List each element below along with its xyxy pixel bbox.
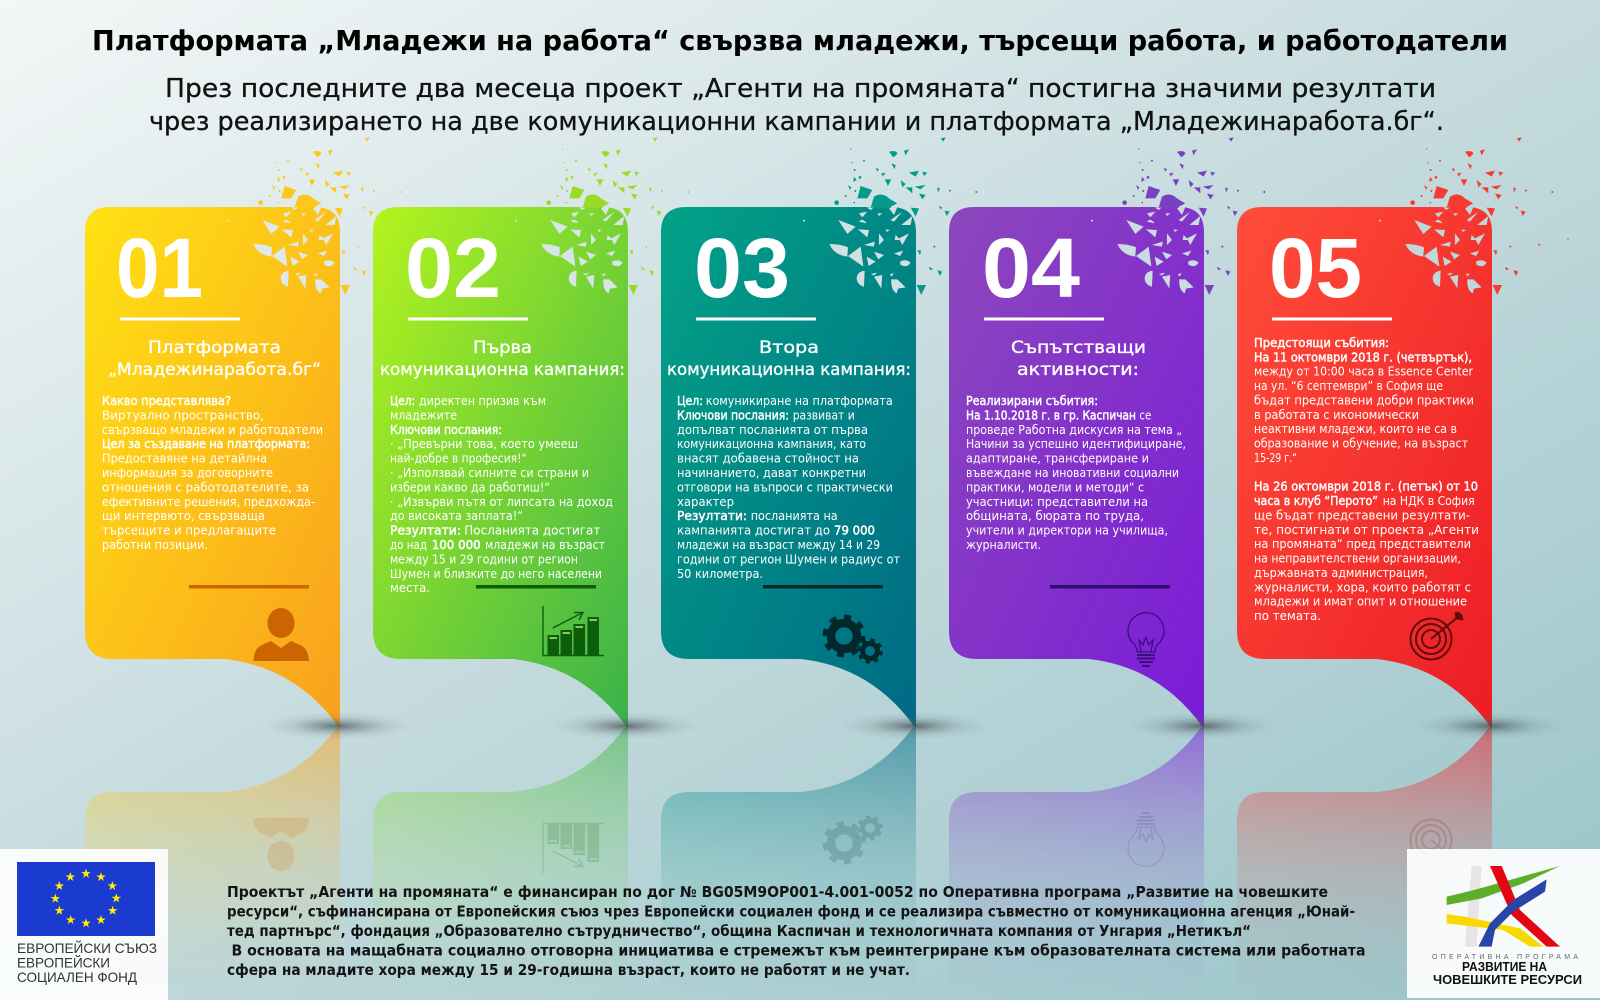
body text: Ключови послания: [390, 423, 502, 437]
body text [677, 394, 900, 581]
body text: Предстоящи събития: [1254, 336, 1389, 350]
heading: комуникационна кампания: [667, 360, 911, 380]
body text: директен призив към [419, 394, 546, 408]
body text: Предоставяне на детайлна [102, 452, 267, 466]
body text: · „Превърни това, което умееш [390, 437, 578, 451]
title: Платформата „Младежи на работа“ свързва младежи, търсещи работа, и работодатели [92, 24, 1508, 57]
body text: по темата. [1254, 609, 1321, 623]
body text: внасят добавена стойност на [677, 452, 859, 466]
logo: European Union [0, 849, 168, 1000]
number 05: 05 [1269, 221, 1362, 315]
rule [1272, 318, 1392, 320]
body text: търсещите и предлагащите [102, 524, 276, 538]
body text: години от регион Шумен и радиус от [677, 552, 900, 566]
footer text: тед партнърс“, фондация „Образователно сътрудничество“, община Каспичан и технологичната компания от Унгария „Нетикъл“ [227, 922, 1251, 940]
panel: card 05 upcoming events [1237, 137, 1569, 726]
body text: Цел за създаване на платформата: [102, 437, 310, 451]
number 02: 02 [405, 221, 501, 315]
body text: развиват и [793, 408, 855, 422]
panel: card 04 accompanying activities [949, 137, 1281, 726]
heading [1011, 338, 1146, 380]
body text: учители и директори на училища, [966, 524, 1168, 538]
body text: щи интервюто, свързваща [102, 509, 265, 523]
body text: бъдат представени добри практики [1254, 394, 1474, 408]
body text: журналисти. [966, 538, 1041, 552]
accent line [476, 585, 596, 588]
body text: младежи на възраст между 14 и 29 [677, 538, 880, 552]
body text: участници: представители на [966, 495, 1148, 509]
body text: ефективните решения, предхожда- [102, 495, 315, 509]
accent line [763, 585, 883, 588]
body text [1254, 336, 1479, 623]
EU caption: ЕВРОПЕЙСКИ [17, 954, 110, 970]
rule [120, 318, 240, 320]
panel: card 02 first campaign [373, 137, 705, 726]
body text: Какво представлява? [102, 394, 231, 408]
body text: 15-29 г.“ [1254, 451, 1297, 465]
heading [108, 338, 321, 380]
body text: места. [390, 581, 430, 595]
subtitle: чрез реализирането на две комуникационни кампании и платформата „Младежинаработа.бг“. [149, 107, 1444, 137]
body text: начинанието, дават конкретни [677, 466, 866, 480]
body text: отговори на въпроси с практически [677, 480, 893, 494]
programme caption: ОПЕРАТИВНА ПРОГРАМА [1432, 954, 1578, 961]
body text: най-добре в професия!“ [390, 452, 527, 466]
body text: 79 000 [834, 524, 875, 538]
number 03: 03 [694, 221, 790, 315]
body text: отношения с работодателите, за [102, 480, 309, 494]
body text: журналисти, хора, които работят с [1254, 580, 1471, 594]
body text: в работата с икономически [1254, 408, 1419, 422]
body text: На 26 октомври 2018 г. (петък) от 10 [1254, 480, 1478, 494]
body text: свързващо младежи и работодатели [102, 423, 323, 437]
heading: „Младежинаработа.бг“ [108, 360, 321, 380]
body text: Посланията достигат [464, 524, 600, 538]
body text: проведе Работна дискусия на тема „ [966, 423, 1182, 437]
body text: Цел: [677, 394, 703, 408]
subtitle [149, 74, 1444, 137]
footer text: ресурси“, съфинансирана от Европейския съюз чрез Европейски социален фонд и се реализира съвместно от комуникационна агенция „Юнай- [227, 902, 1355, 920]
body text: Ключови послания: [677, 408, 789, 422]
body text: се [1139, 408, 1151, 422]
body text: Реализирани събития: [966, 394, 1098, 408]
body text: младежи и имат опит и отношение [1254, 595, 1467, 609]
body text: · „Извърви пътя от липсата на доход [390, 495, 613, 509]
body text: информация за договорните [102, 466, 273, 480]
heading [380, 338, 625, 380]
body text: избери какво да работиш!“ [390, 480, 550, 494]
body text: Начини за успешно идентифициране, [966, 437, 1186, 451]
body text: държавната администрация, [1254, 566, 1428, 580]
icon: person [254, 608, 309, 661]
EU flag [17, 862, 155, 936]
heading: комуникационна кампания: [380, 360, 625, 380]
icon: gears [825, 617, 881, 662]
body text: въвеждане на иновативни социални [966, 466, 1179, 480]
EU caption: ЕВРОПЕЙСКИ СЪЮЗ [17, 939, 157, 956]
body text [102, 394, 323, 552]
heading: активности: [1017, 360, 1139, 380]
card reflections [85, 726, 1492, 950]
footer text: Проектът „Агенти на промяната“ е финансиран по дог № BG05M9OP001-4.001-0052 по Оперативна програма „Развитие на човешките [227, 883, 1328, 901]
body text: Шумен и близките до него населени [390, 567, 602, 581]
body text: практики, модели и методи“ с [966, 480, 1144, 494]
icon: target [1410, 612, 1463, 660]
body text: работни позиции. [102, 538, 208, 552]
heading: Съпътстващи [1011, 338, 1146, 358]
body text [390, 394, 613, 595]
logo: Operational Programme [1407, 849, 1600, 998]
body text: неактивни младежи, които не са в [1254, 422, 1457, 436]
icon: light bulb [1128, 613, 1164, 666]
body text: комуникиране на платформата [706, 394, 893, 408]
body text: Резултати: [390, 524, 461, 538]
body text: На 1.10.2018 г. в гр. Каспичан [966, 408, 1136, 422]
heading: Втора [759, 338, 819, 358]
rule [696, 318, 816, 320]
body text: посланията на [751, 509, 838, 523]
accent line [189, 585, 309, 588]
body text: допълват посланията от първа [677, 423, 868, 437]
body text: адаптиране, трансфериране и [966, 452, 1149, 466]
heading [667, 338, 911, 380]
footer text [227, 883, 1366, 979]
body text: на ул. “6 септември” в София ще [1254, 379, 1443, 393]
body text: младежите [390, 408, 457, 422]
body text: ще бъдат представени резултати- [1254, 508, 1470, 522]
body text: на промяната“ пред представители [1254, 537, 1471, 551]
footer text: В основата на мащабната социално отговорна инициатива е стремежът към реинтегриране към образователната система или работната [232, 942, 1366, 960]
rule [984, 318, 1104, 320]
body text: часа в клуб “Перото” [1254, 494, 1378, 508]
body text: Резултати: [677, 509, 747, 523]
panel: card 03 second campaign [661, 137, 993, 726]
body text: Виртуално пространство, [102, 408, 264, 422]
body text: 50 километра. [677, 567, 763, 581]
body text: младежи на възраст [485, 538, 605, 552]
body text: образование и обучение, на възраст [1254, 437, 1468, 451]
icon reflections [254, 813, 1463, 873]
body text: · „Използвай силните си страни и [390, 466, 589, 480]
programme caption: РАЗВИТИЕ НА [1462, 960, 1547, 974]
body text: характер [677, 495, 734, 509]
tip shadows [262, 712, 1566, 740]
body text: до високата заплата!“ [390, 509, 523, 523]
rule [408, 318, 528, 320]
body text: На 11 октомври 2018 г. (четвъртък), [1254, 350, 1472, 364]
programme emblem [1447, 866, 1560, 947]
icon: bar chart [543, 606, 604, 656]
number 04: 04 [982, 221, 1080, 315]
body text: общината, бюрата по труда, [966, 509, 1144, 523]
body text: до над [390, 538, 427, 552]
body text: на неправителствени организации, [1254, 552, 1461, 566]
number 01: 01 [116, 221, 203, 315]
footer text: сфера на младите хора между 15 и 29-годишна възраст, които не работят и не учат. [227, 961, 910, 979]
heading: Първа [473, 338, 532, 358]
EU caption: СОЦИАЛЕН ФОНД [17, 969, 137, 985]
body text: комуникационна кампания, като [677, 437, 866, 451]
body text: кампанията достигат до [677, 524, 830, 538]
panel: card 01 platform [85, 137, 417, 726]
body text: между 15 и 29 години от регион [390, 552, 578, 566]
body text: 100 000 [432, 538, 481, 552]
body text: на НДК в София [1383, 494, 1475, 508]
programme caption: ЧОВЕШКИТЕ РЕСУРСИ [1433, 973, 1582, 987]
EU caption [17, 939, 157, 985]
accent line [1050, 585, 1170, 588]
subtitle: През последните два месеца проект „Агенти на промяната“ постигна значими резултати [165, 74, 1436, 104]
body text [966, 394, 1186, 552]
heading: Платформата [148, 338, 281, 358]
programme caption [1432, 954, 1582, 987]
body text: между от 10:00 часа в Essence Center [1254, 365, 1473, 379]
body text: те, постигнати от проекта „Агенти [1254, 523, 1479, 537]
body text: Цел: [390, 394, 415, 408]
